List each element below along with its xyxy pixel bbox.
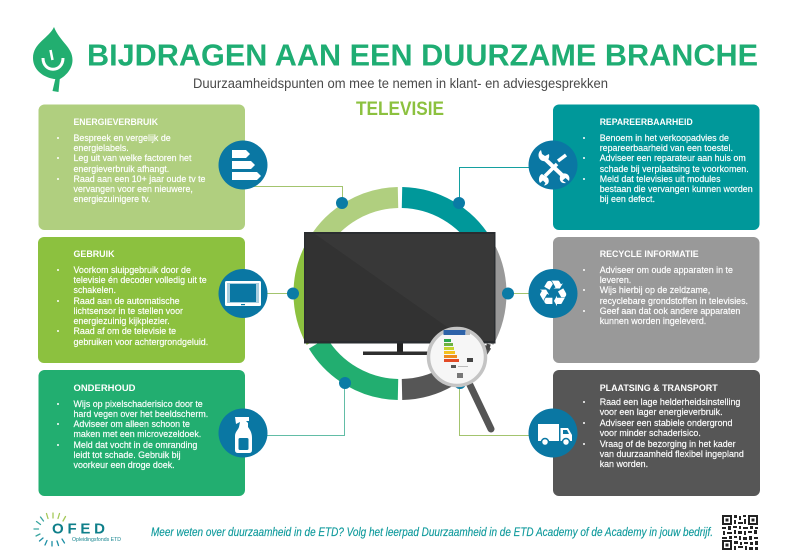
- text: plaatsing points: Raad een lage helderheidsinstelling: [600, 397, 740, 407]
- bullets: [583, 401, 585, 445]
- text: recycle points: Wijs hierbij op de zeldzame,: [600, 285, 710, 295]
- category heading: televisie: TELEVISIE: [356, 99, 444, 120]
- text: recycle points: kunnen worden ingeleverd.: [600, 316, 706, 326]
- heading: gebruik: GEBRUIK: [74, 249, 115, 260]
- icon: spray bottle: [218, 408, 268, 458]
- bullets: [57, 403, 59, 446]
- text: recycle points: Geef aan dat ook andere apparaten: [600, 306, 740, 316]
- icon: delivery truck: [528, 408, 578, 458]
- icon: television: [218, 269, 268, 318]
- text: recycle points: recyclebare grondstoffen in televisies.: [600, 296, 748, 306]
- logo wordmark: OFED: [52, 520, 105, 538]
- text: repareerbaarheid points: bij een defect.: [600, 194, 655, 204]
- text: energieverbruik points: Leg uit van welke factoren het: [74, 153, 192, 163]
- ring: six segments around the television: [304, 198, 496, 390]
- text: energieverbruik points: vervangen voor een nieuwere,: [74, 184, 193, 194]
- text: recycle points: Adviseer om oude apparaten in te: [600, 265, 733, 275]
- heading: recycle informatie: RECYCLE INFORMATIE: [600, 249, 699, 260]
- text: onderhoud points: Wijs op pixelschaderisico door te: [74, 399, 203, 409]
- bullets: [583, 137, 585, 180]
- footer call to action: Meer weten over duurzaamheid in de ETD? Volg het leerpad Duurzaamheid in de ETD Academy of de Academy in jouw bedrijf.: [151, 527, 713, 539]
- icon: energy label: [218, 140, 268, 190]
- text: gebruik points: gebruiken voor achtergrondgeluid.: [74, 337, 208, 347]
- text: gebruik points: energiezuinig kijkplezier.: [74, 316, 170, 326]
- text: onderhoud points: maken met een microvezeldoek.: [74, 429, 201, 439]
- text: gebruik points: Voorkom sluipgebruik door de: [74, 265, 191, 275]
- text: repareerbaarheid points: schade bij verplaatsing te voorkomen.: [600, 164, 749, 174]
- text: plaatsing points: kan worden.: [600, 459, 648, 469]
- title: BIJDRAGEN AAN EEN DUURZAME BRANCHE: [87, 38, 758, 72]
- logo tagline: Opleidingsfonds ETD: [72, 537, 121, 543]
- text: repareerbaarheid points: bestaan die vervangen kunnen worden: [600, 184, 753, 194]
- text: recycle points: leveren.: [600, 275, 631, 285]
- text: repareerbaarheid points: repareerbaarheid van een toestel.: [600, 143, 733, 153]
- heading: onderhoud: ONDERHOUD: [74, 383, 136, 394]
- text: plaatsing points: voor minder schaderisico.: [600, 428, 701, 438]
- panel: onderhoud: [38, 370, 245, 496]
- text: onderhoud points: voorkeur een droge doek.: [74, 460, 175, 470]
- panel: gebruik: [38, 237, 245, 363]
- QR code: [722, 515, 758, 550]
- connector lines: [245, 168, 530, 436]
- text: energieverbruik points: energiezuinigere tv.: [74, 194, 150, 204]
- panel: plaatsing en transport: [553, 370, 760, 496]
- text: plaatsing points: voor een lager energieverbruik.: [600, 407, 723, 417]
- text: onderhoud points: hard vegen over het beeldscherm.: [74, 409, 208, 419]
- text: gebruik points: schakelen.: [74, 285, 116, 295]
- text: repareerbaarheid points: Meld dat televisies uit modules: [600, 174, 721, 184]
- panel: repareerbaarheid: [553, 104, 760, 230]
- text: onderhoud points: Meld dat vocht in de omranding: [74, 440, 197, 450]
- text: gebruik points: Raad aan de automatische: [74, 296, 180, 306]
- heading: repareerbaarheid: REPAREERBAARHEID: [600, 117, 693, 128]
- logo rays: [34, 513, 66, 546]
- text: energieverbruik points: energieverbruik afhangt.: [74, 164, 169, 174]
- text: energieverbruik points: Bespreek en vergelijk de: [74, 133, 171, 143]
- subtitle: Duurzaamheidspunten om mee te nemen in klant- en adviesgesprekken: [193, 76, 608, 91]
- panel: recycle informatie: [553, 237, 760, 363]
- icon: recycling: ♻: [537, 274, 569, 315]
- text: energieverbruik points: Raad aan een 10+ jaar oude tv te: [74, 174, 206, 184]
- heading: plaatsing en transport: PLAATSING & TRANSPORT: [600, 383, 718, 394]
- bullets: [583, 269, 585, 312]
- television: [304, 232, 496, 355]
- magnifying glass with energy label: [428, 328, 491, 429]
- text: plaatsing points: Adviseer een stabiele ondergrond: [600, 418, 732, 428]
- bullets: [57, 137, 59, 180]
- text: plaatsing points: van duurzaamheid flexibel ingepland: [600, 449, 744, 459]
- panel: energieverbruik: [38, 104, 245, 230]
- text: onderhoud points: Adviseer om alleen schoon te: [74, 419, 190, 429]
- text: gebruik points: televisie én decoder volledig uit te: [74, 275, 207, 285]
- icon: wrench and screwdriver: [528, 140, 578, 190]
- text: energieverbruik points: energielabels.: [74, 143, 129, 153]
- logo: OFED: [34, 513, 121, 546]
- bullets: [57, 269, 59, 332]
- text: plaatsing points: Vraag of de bezorging in het kader: [600, 439, 736, 449]
- heading: energieverbruik: ENERGIEVERBRUIK: [74, 117, 158, 128]
- text: onderhoud points: leidt tot schade. Gebruik bij: [74, 450, 181, 460]
- icon: recycling: [528, 269, 578, 318]
- text: repareerbaarheid points: Adviseer een reparateur aan huis om: [600, 153, 746, 163]
- text: gebruik points: lichtsensor in te stellen voor: [74, 306, 183, 316]
- text: gebruik points: Raad af om de televisie te: [74, 326, 176, 336]
- ring connector dots: [287, 197, 514, 389]
- text: repareerbaarheid points: Benoem in het verkoopadvies de: [600, 133, 729, 143]
- logo: leaf with power symbol: [33, 27, 72, 92]
